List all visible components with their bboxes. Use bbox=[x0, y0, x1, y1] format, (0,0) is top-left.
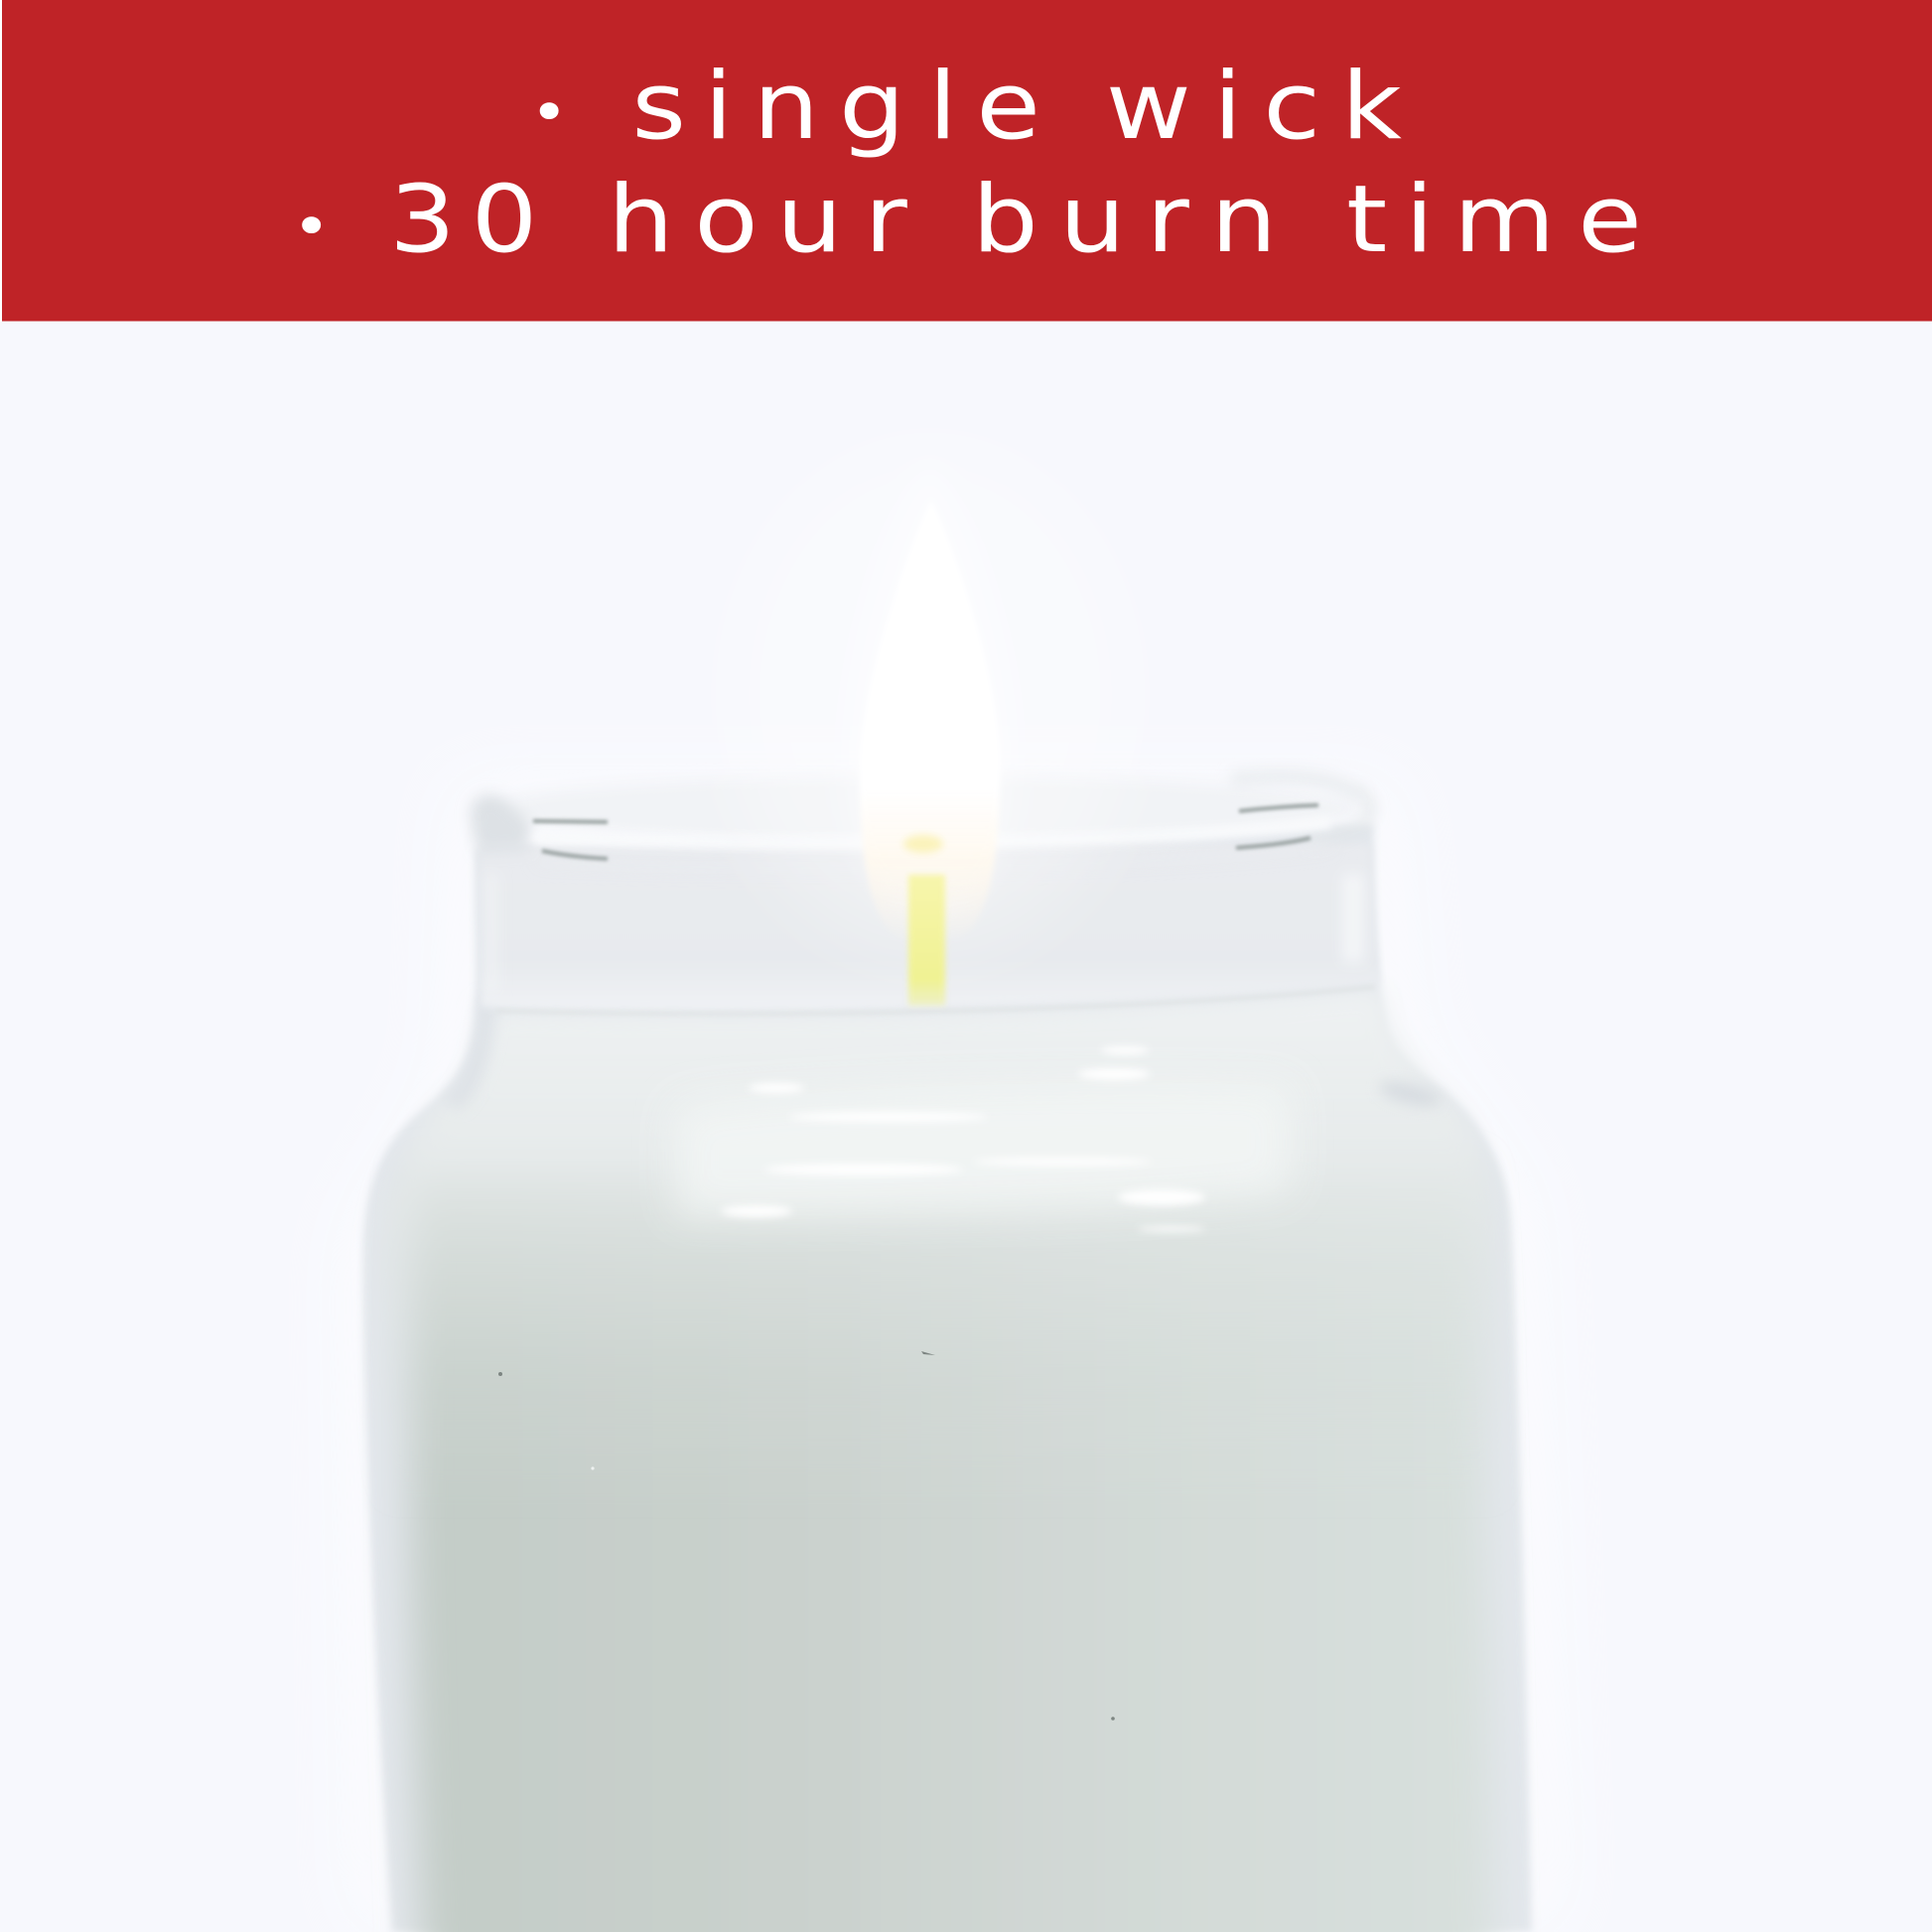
white halo around jar bbox=[338, 774, 1569, 1932]
red banner bbox=[2, 0, 1932, 322]
right rim edge bbox=[1311, 790, 1370, 842]
flame ambient glow bbox=[722, 437, 1139, 953]
rim lower shade bbox=[536, 846, 1330, 868]
wick bbox=[908, 875, 945, 1006]
left edge white strip bbox=[0, 0, 2, 322]
flame halo bbox=[845, 459, 1014, 918]
flame bbox=[722, 437, 1139, 953]
rim dark reflections bbox=[533, 805, 1318, 859]
back rim edge right bbox=[1231, 777, 1358, 796]
left neck shadow bbox=[442, 993, 496, 1110]
upper wax lightening bbox=[377, 987, 1504, 1509]
wax specks bbox=[498, 1351, 1115, 1721]
glass rim bbox=[471, 775, 1370, 868]
neck side highlights bbox=[484, 874, 1364, 993]
banner text: 30 hour burn time: • bbox=[293, 193, 331, 260]
glass jar body bbox=[363, 824, 1532, 1932]
left rim blob bbox=[471, 794, 531, 852]
wax fill bbox=[409, 1172, 1494, 1932]
banner text: 30 hour burn time: 30 hour burn time bbox=[389, 164, 1642, 274]
glass highlights bbox=[721, 1046, 1205, 1231]
rim opening bbox=[486, 775, 1360, 843]
shoulder sheen bbox=[675, 1083, 1291, 1217]
fill line bbox=[496, 987, 1374, 1014]
neck of jar bbox=[479, 844, 1380, 1010]
right shoulder shadow bbox=[1377, 1077, 1443, 1111]
banner text: single wick: • bbox=[530, 78, 568, 146]
candle jar photo bbox=[338, 437, 1569, 1932]
rim white band bbox=[536, 822, 1330, 843]
banner text: single wick: single wick bbox=[631, 51, 1402, 161]
flame base bbox=[903, 835, 943, 853]
flame body bbox=[860, 500, 1000, 938]
